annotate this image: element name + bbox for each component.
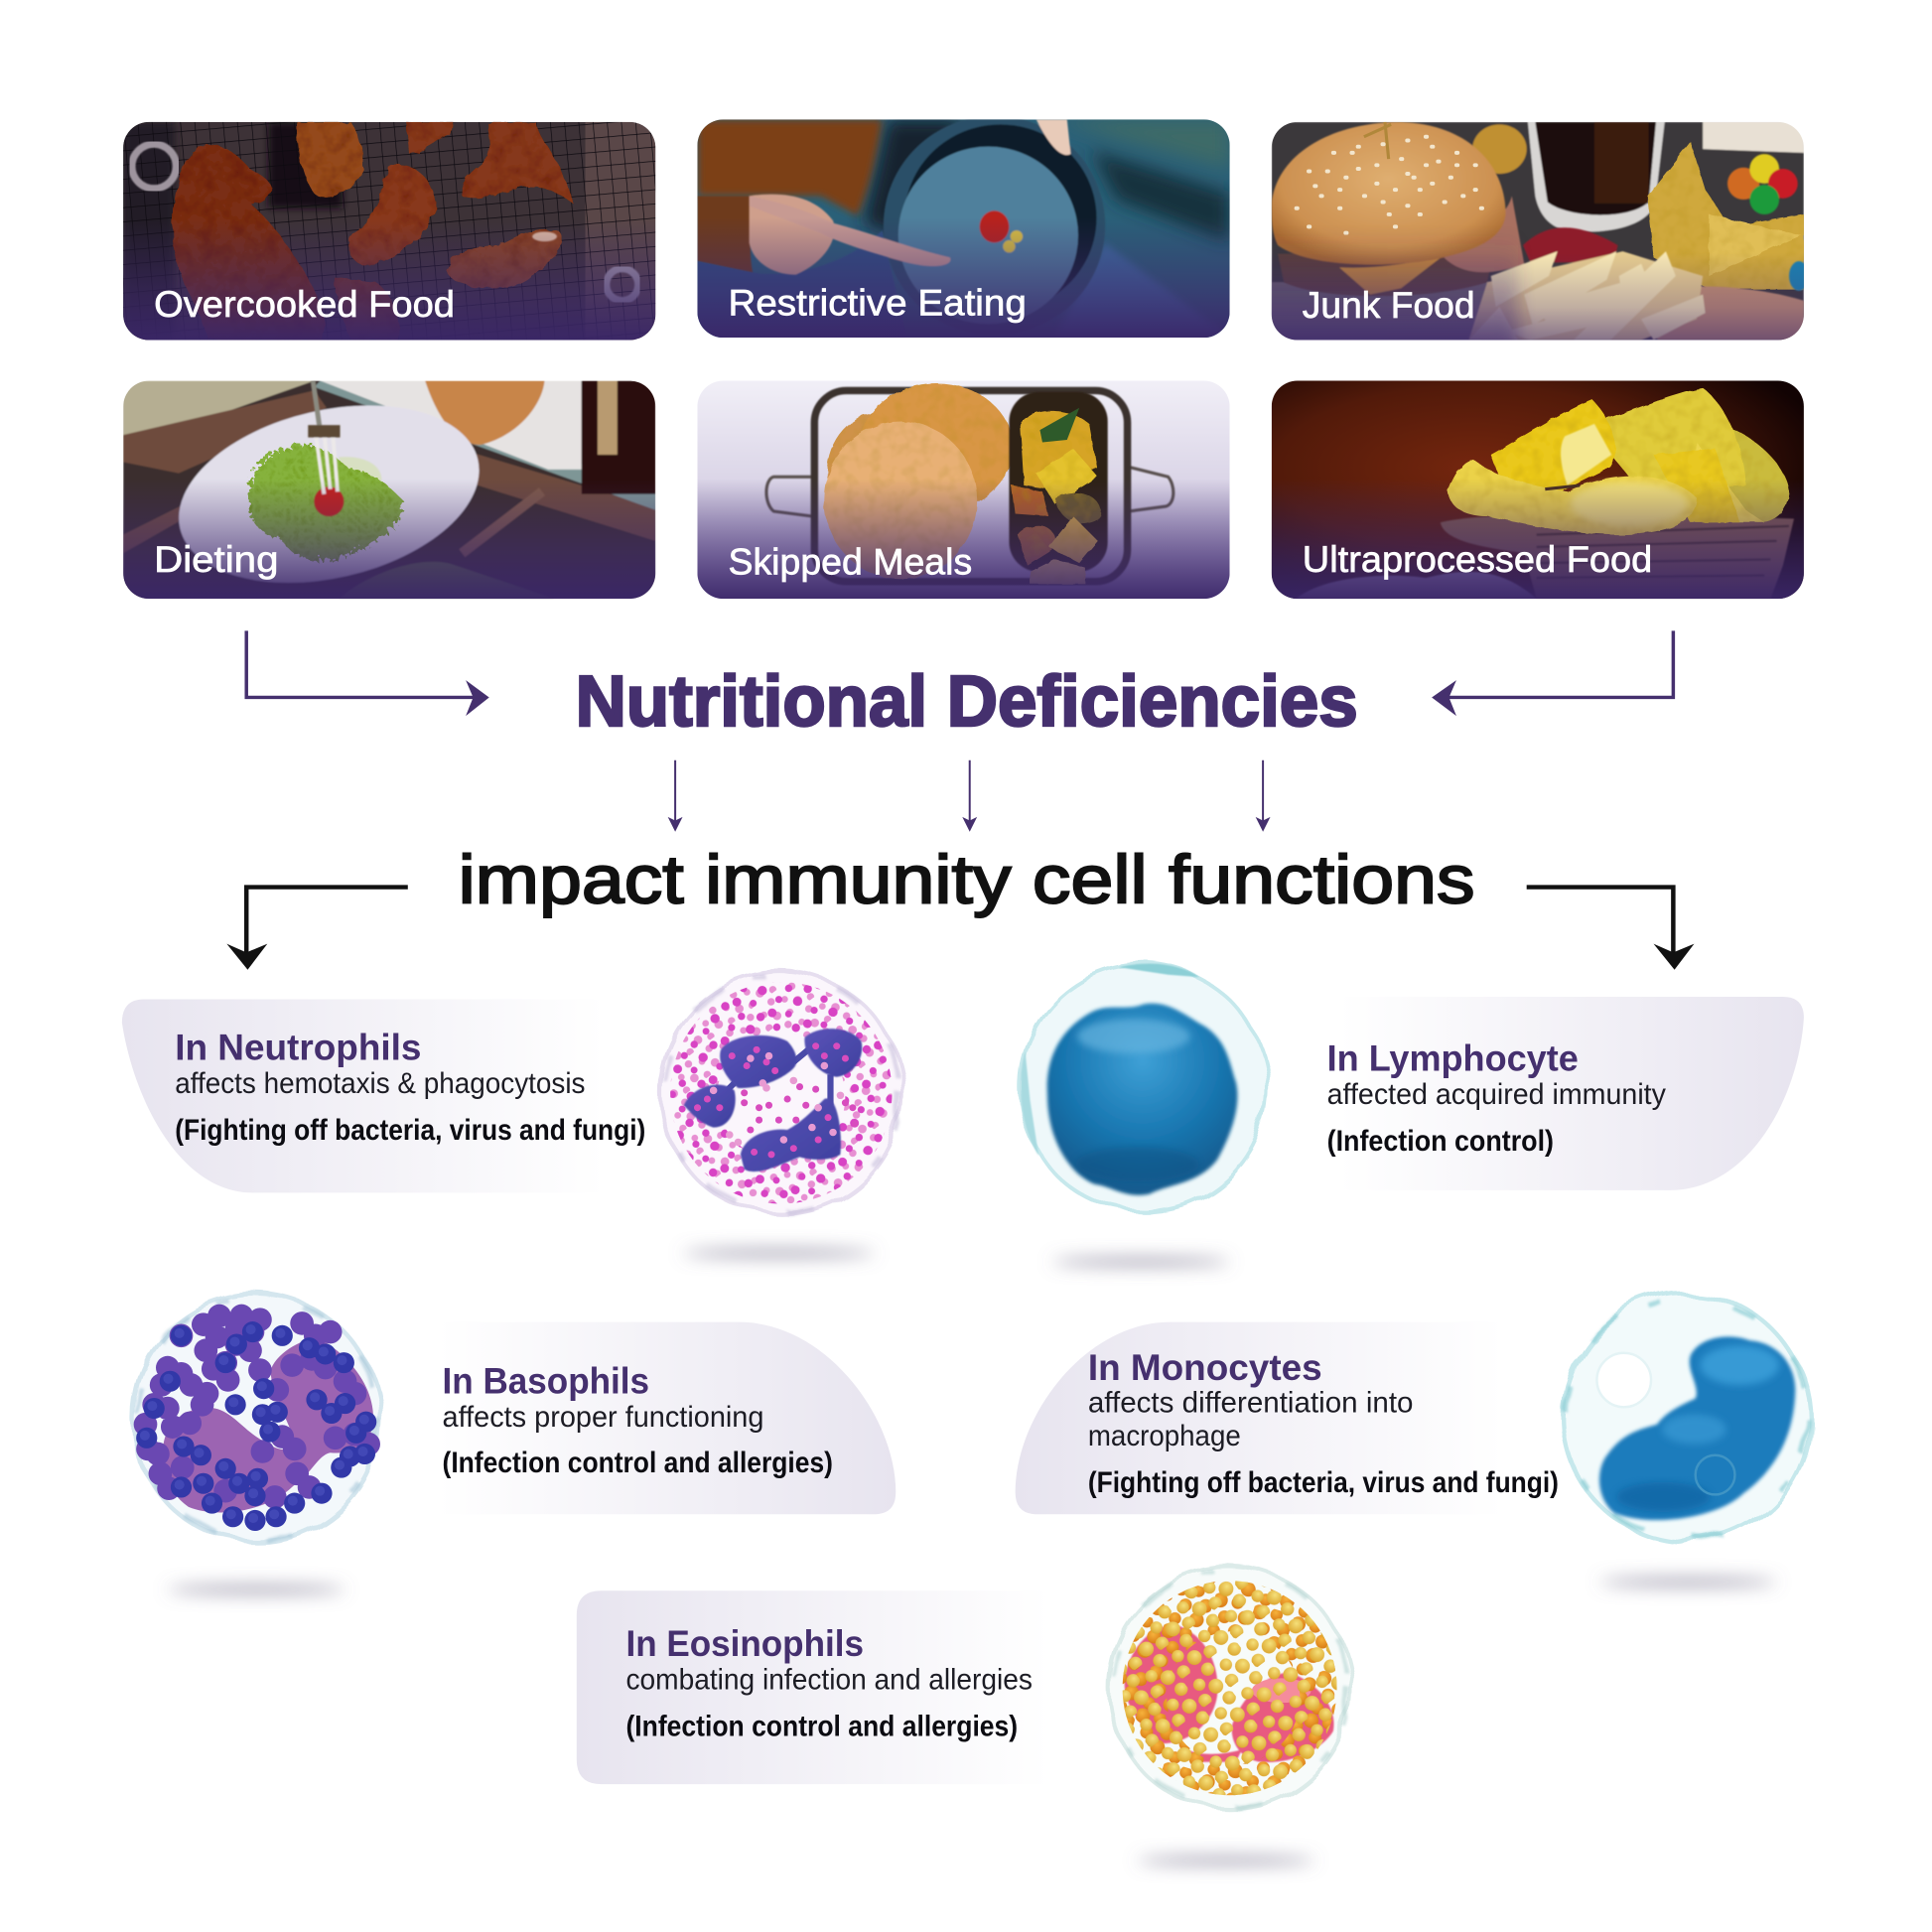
panel: Eosinophils text: combating infection and allergies [625,1664,1033,1697]
photo: chicken on a wire rack [123,122,655,341]
label: Dieting: Dieting [154,538,278,580]
label: Skipped Meals: Skipped Meals [728,540,972,582]
label: Overcooked Food: Overcooked Food [154,283,455,325]
label: Restrictive Eating: Restrictive Eating [728,282,1027,324]
photo: salad on a white plate [123,378,655,611]
panel: Restrictive Eating card [697,116,1230,338]
heading: impact immunity cell functions: impact immunity cell functions [459,843,1475,918]
panel: Skipped Meals card [697,380,1230,599]
shadow: under basophil [168,1587,345,1592]
arrow: right bracket into Nutritional Deficiencies [1432,630,1673,716]
photo: burger, cola, fries and nachos [1272,122,1809,341]
photo: lunch tin with puri and potatoes [697,380,1230,599]
panel: Junk Food card [1271,121,1804,340]
panel: Neutrophils text: affects hemotaxis & phagocytosis [175,1067,586,1100]
panel: Neutrophils text: In Neutrophils [175,1026,421,1067]
shadow: under neutrophil [683,1250,875,1256]
cell: Lymphocyte [1021,964,1267,1211]
heading: Nutritional Deficiencies: Nutritional Deficiencies [576,662,1358,742]
panel: Monocytes text: affects differentiation into [1088,1386,1414,1419]
arrow: black elbow to the right [1527,888,1694,970]
cell: Monocyte [1563,1294,1809,1540]
panel: Lymphocyte text: (Infection control) [1327,1125,1554,1158]
infographic canvas [122,119,1815,1876]
panel: Lymphocyte text: In Lymphocyte [1327,1036,1579,1078]
cell: Basophil [133,1295,379,1542]
photo: potato chips in a basket [1272,380,1804,599]
arrows: three small downward arrows [668,760,1271,832]
panel: Neutrophils text [122,1000,690,1192]
panel: Basophils text [357,1322,896,1514]
panel: Monocytes text: macrophage [1088,1420,1241,1452]
panel: Ultraprocessed Food card [1272,380,1804,599]
panel: Eosinophils text: In Eosinophils [625,1622,864,1664]
panel: Monocytes text: In Monocytes [1088,1346,1322,1388]
panel: Basophils text: In Basophils [443,1360,649,1402]
cell: Eosinophil [1106,1565,1353,1811]
panel: Eosinophils text: (Infection control and allergies) [625,1711,1018,1743]
arrow: black elbow to the left [226,888,408,970]
panel: Eosinophils text [577,1590,1134,1784]
arrow: left bracket into Nutritional Deficiencies [246,630,489,716]
label: Ultraprocessed Food: Ultraprocessed Food [1303,538,1652,580]
panel: Neutrophils text: (Fighting off bacteria, virus and fungi) [175,1114,645,1147]
photo: empty plate with one tomato [697,116,1230,338]
panel: Basophils text: affects proper functioning [443,1401,763,1434]
sesame seeds [1297,137,1482,233]
panel: Dieting card [123,378,655,611]
panel: Basophils text: (Infection control and allergies) [443,1447,833,1479]
shadow: under monocyte [1599,1579,1777,1586]
panel: Lymphocyte text: affected acquired immunity [1327,1078,1666,1111]
shadow: under eosinophil [1138,1858,1314,1863]
cell: Neutrophil [658,970,904,1216]
panel: Overcooked Food card [123,122,655,341]
panel: Monocytes text: (Fighting off bacteria, virus and fungi) [1088,1466,1559,1499]
shadow: under lymphocyte [1052,1259,1230,1265]
panel: Lymphocyte text [1257,997,1804,1190]
panel: Monocytes text [1016,1322,1589,1514]
label: Junk Food: Junk Food [1303,284,1475,326]
